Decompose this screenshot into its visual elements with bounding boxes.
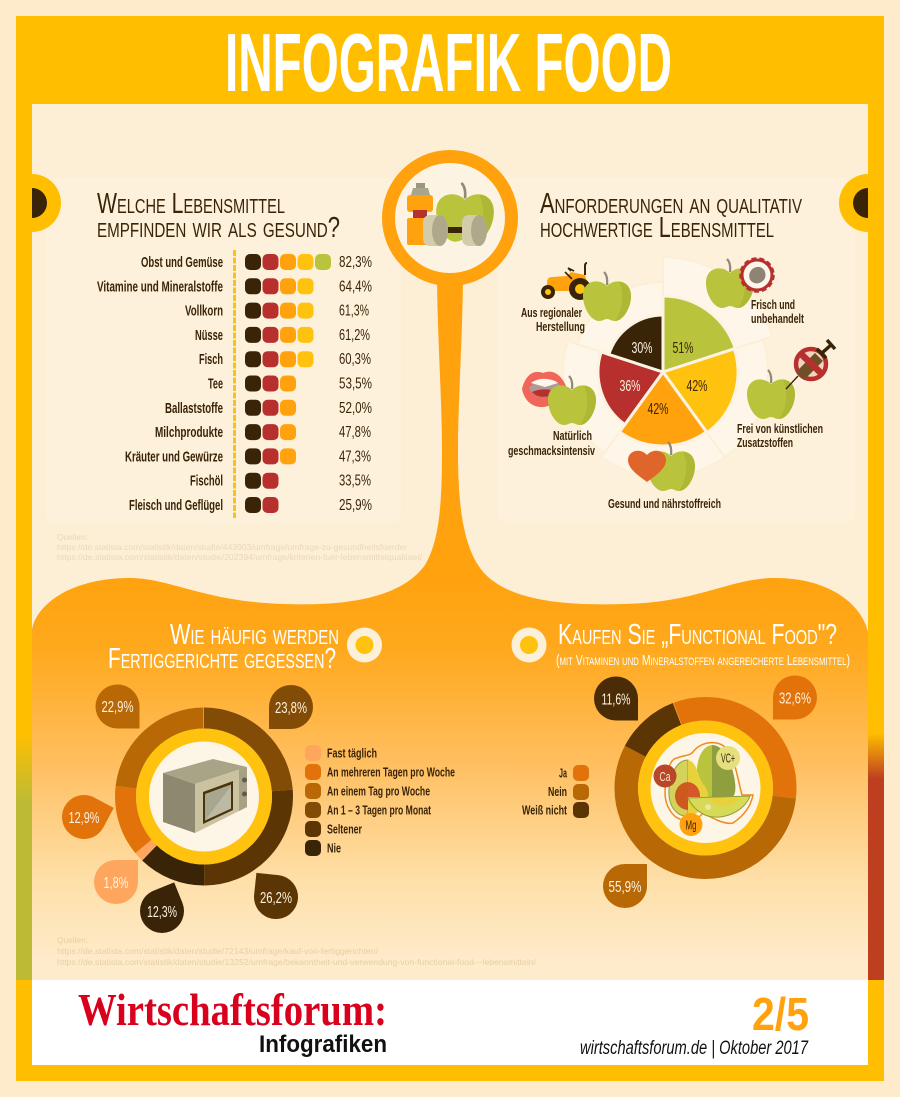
row: Milchprodukte [155,424,371,441]
row: Tee [208,376,372,392]
row: Fischöl [190,473,371,490]
slice: 36% [598,352,663,425]
row: Milchprodukte: 47,8% [339,424,371,441]
label: regional [521,306,585,334]
sources bottom [57,935,537,967]
bubble: 1,8%: 1,8% [104,875,129,892]
bubble: 12,9%: 12,9% [68,810,100,827]
bubble: 32,6%: 32,6% [779,690,811,708]
heading: quality requirements [540,188,802,244]
label: flavour: geschmacksintensiv [508,444,595,458]
legend: ready meals: Fast täglich [327,746,377,760]
label: fresh: Frisch und [751,298,795,312]
heading: ready meals: Fertiggerichte gegessen? [108,643,336,675]
sources top: Quellen: [57,532,88,542]
pie chart: requirements [598,296,738,446]
legend: ready meals: An mehreren Tagen pro Woche [327,766,455,780]
icon: seal [740,258,774,292]
donut hub right [638,720,773,856]
badge: Ca [654,764,676,788]
pie values: 42% [648,401,668,418]
row: Fleisch und Geflügel [129,497,372,514]
row: Obst und Gemüse: 82,3% [339,254,372,271]
icon: apple regional [583,272,631,321]
row: Fisch: Fisch [199,351,223,368]
row: Vollkorn: Vollkorn [185,303,223,320]
bubble: 11,6%: 11,6% [602,692,631,708]
icon: drink bottle [407,183,433,245]
row: Ballaststoffe: 52,0% [339,400,372,417]
side marker right [839,174,868,232]
side marker left [32,174,61,232]
heading: healthy foods: Welche Lebensmittel [97,188,285,220]
heading: quality requirements: Anforderungen an qualitativ [540,188,802,220]
sources bottom: https://de.statista.com/statistik/daten/studie/13252/umfrage/bekanntheit-und-verwendung-von-functional-food---lebensmitteln/ [57,957,537,967]
label: regional: Aus regionaler [521,306,582,320]
label: no additives: Frei von künstlichen [737,422,823,436]
row: Tee: 53,5% [339,376,372,392]
logo subtitle: Infografiken [259,1031,387,1058]
row: Fischöl: 33,5% [339,473,371,490]
bubble: 12,3%: 12,3% [147,904,177,921]
label: no additives [737,422,823,450]
heading: functional food [556,619,850,669]
icon: apple flavour [548,376,596,425]
icon: tractor [541,263,591,300]
icon: avocado and pear [665,743,753,823]
marker left heading [347,628,382,662]
heading: healthy foods: empfinden wir als gesund? [97,212,340,244]
pie values: 51% [672,340,694,357]
slice: 30% [609,315,663,372]
heading: quality requirements: hochwertige Lebensmittel [540,212,774,244]
icon: apple healthy [647,442,695,491]
legend: ready meals [305,745,455,856]
icon: apple fresh [706,259,754,308]
row: Nüsse: Nüsse [195,327,223,344]
sources bottom: Quellen: [57,935,88,945]
page number: 2/5 [752,988,809,1040]
row: Milchprodukte: Milchprodukte [155,424,223,441]
icon: lips [522,372,566,407]
pie values: 30% [632,340,652,357]
legend: ready meals: An einem Tag pro Woche [327,784,430,798]
label: fresh: unbehandelt [751,312,805,326]
icon: microwave [163,759,247,833]
dashed axis [233,250,236,518]
sources top: https://de.statista.com/statistik/daten/studie/202394/umfrage/kriterien-fuer-lebensmittelqualitaet/ [57,552,423,562]
pie values [620,340,708,418]
label: flavour: Natürlich [553,429,592,443]
row: Fisch [199,351,371,368]
legend: functional food [522,765,589,818]
row: Ballaststoffe [165,400,372,417]
row: Kräuter und Gewürze: 47,3% [339,448,371,465]
bubble: 55,9% [603,864,647,908]
icon: crossed syringe [786,340,835,389]
icon: dumbbell [423,215,487,246]
bubble: 55,9%: 55,9% [608,879,642,896]
row: Fischöl: Fischöl [190,473,223,490]
row: Ballaststoffe: Ballaststoffe [165,400,223,417]
heading: ready meals [108,619,339,675]
inner cream panel [32,104,868,980]
row: Kräuter und Gewürze [125,448,371,465]
pale wedges behind pie [563,257,772,477]
bubble: 22,9%: 22,9% [102,699,134,716]
bar chart: healthy foods [97,254,372,514]
label: regional: Herstellung [536,320,585,334]
central circle icon [382,150,518,286]
label: flavour [508,429,595,458]
icon: apple [436,183,494,242]
row: Obst und Gemüse: Obst und Gemüse [141,254,223,271]
row: Fleisch und Geflügel: Fleisch und Geflügel [129,497,223,514]
legend: functional food: Nein [548,785,567,799]
legend: ready meals: Seltener [327,822,362,836]
row: Vitamine und Mineralstoffe [97,278,372,295]
bubble: 23,8% [269,685,313,729]
sources top: https://de.statista.com/statistik/daten/studie/443903/umfrage/umfrage-zu-gesundheitsfoerder [57,542,407,552]
badge: Ca: Ca [660,769,671,784]
legend: functional food: Ja [559,766,568,780]
badge: VC+ [716,746,740,770]
sources top [57,532,423,562]
bubble: 11,6% [594,676,638,720]
row: Vollkorn: 61,3% [339,303,369,320]
icon: heart [628,451,666,482]
legend: functional food: Weiß nicht [522,804,568,818]
sources bottom: https://de.statista.com/statistik/daten/studie/72143/umfrage/kauf-von-fertiggerichten/ [57,946,379,956]
bubble: 23,8%: 23,8% [275,700,307,717]
heading: ready meals: Wie häufig werden [170,619,339,651]
bubble: 26,2% [252,873,300,921]
badge: VC+: VC+ [721,750,735,766]
row: Nüsse: 61,2% [339,327,370,344]
pie values: 36% [620,378,640,395]
label: no additives: Zusatzstoffen [737,436,793,450]
icon: apple no additives [747,370,795,419]
legend: ready meals: Nie [327,842,341,856]
legend: ready meals: An 1 – 3 Tagen pro Monat [327,804,432,818]
badge: Mg: Mg [686,818,696,832]
label: healthy: Gesund und nährstoffreich [608,497,721,511]
website and date: wirtschaftsforum.de | Oktober 2017 [580,1038,809,1059]
donut hub [136,728,272,864]
donut chart: ready meals [126,718,282,875]
faint panels [46,178,855,523]
row: Nüsse [195,327,370,344]
row: Kräuter und Gewürze: Kräuter und Gewürze [125,448,223,465]
pie values: 42% [686,378,708,395]
slice: 42% yellow [663,349,738,433]
slice: 51% [663,296,735,372]
label: fresh [751,298,805,326]
row: Fisch: 60,3% [339,351,371,368]
bubble: 1,8% [94,860,138,904]
footer panel [32,980,868,1065]
donut chart: functional food [603,686,808,890]
row: Fleisch und Geflügel: 25,9% [339,497,372,514]
row: Vitamine und Mineralstoffe: Vitamine und Mineralstoffe [97,278,223,295]
slice: 42% orange [620,372,706,446]
row: Obst und Gemüse [141,254,372,271]
bubble: 32,6% [773,676,817,720]
logo: Wirtschaftsforum: [78,984,387,1035]
bubble: 12,9% [54,787,114,847]
row: Vollkorn [185,303,369,320]
marker right heading [512,628,546,662]
bubble: 26,2%: 26,2% [260,890,292,907]
badge: Mg [680,813,702,836]
heading: healthy foods [97,188,340,244]
row: Tee: Tee [208,376,223,392]
bubble: 12,3% [133,882,191,940]
bubble: 22,9% [96,684,140,728]
row: Vitamine und Mineralstoffe: 64,4% [339,278,372,295]
orange flowing area with stem [32,270,868,980]
